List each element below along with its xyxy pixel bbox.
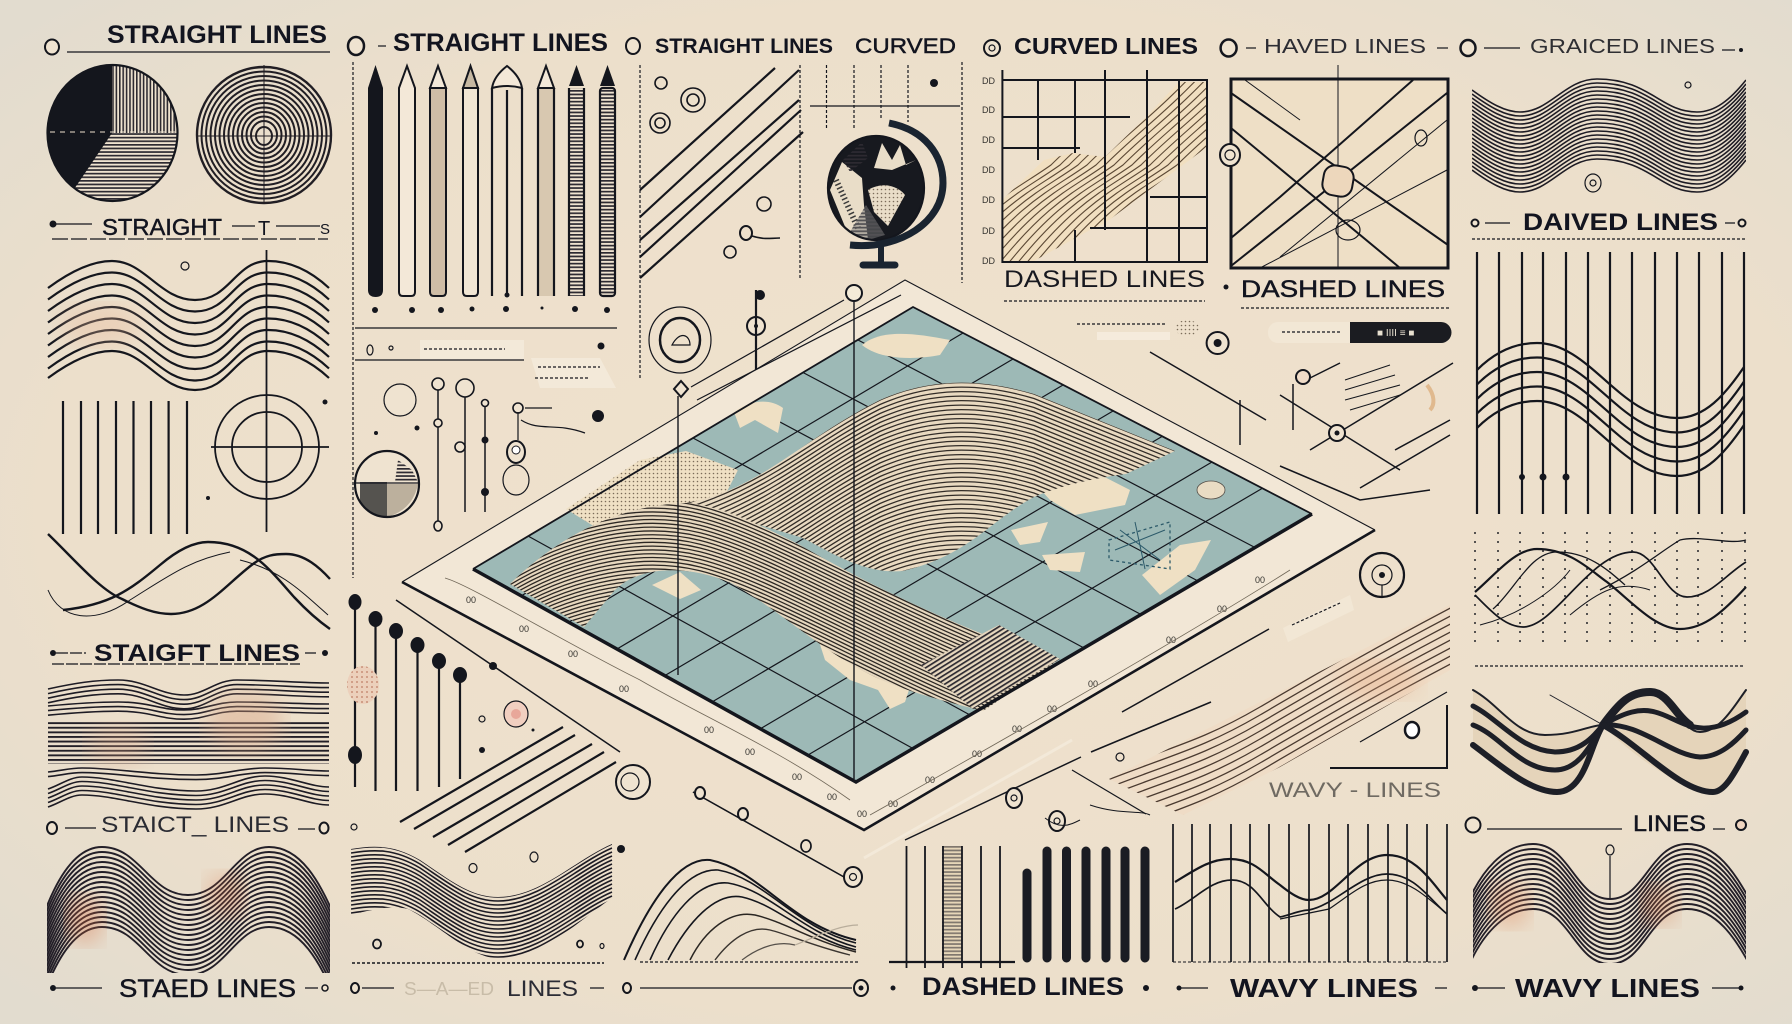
chart: grid with diagonal band — [982, 70, 1208, 264]
heading: lines right — [1466, 811, 1746, 836]
panel: right column — [1460, 36, 1755, 1003]
chart: vertical lines — [63, 401, 187, 534]
axis labels: DD — [982, 256, 995, 266]
land south — [815, 629, 909, 709]
band tick labels: 00 — [925, 775, 935, 785]
chart: fine wave band — [1472, 79, 1746, 192]
pin stems — [355, 602, 460, 791]
heading: lines with ghost text — [351, 976, 631, 1001]
band tick labels: 00 — [1255, 575, 1265, 585]
band tick labels: 00 — [1217, 604, 1227, 614]
heading: dashed lines 2 — [1224, 276, 1450, 308]
grid lines — [1002, 70, 1207, 262]
map grid lines — [521, 333, 1262, 755]
band tick labels: 00 — [857, 809, 867, 819]
pill label — [1268, 322, 1452, 343]
chart: x frame — [1220, 65, 1448, 268]
panel: bottom right of map — [1006, 553, 1460, 855]
vertical pins through map — [674, 285, 901, 779]
pencil 6 — [538, 66, 554, 296]
band tick labels: 00 — [619, 684, 629, 694]
axis labels — [982, 76, 995, 266]
band inner lines — [445, 570, 1290, 815]
icon: concentric ring circle — [197, 65, 331, 203]
tag strip — [1283, 595, 1354, 642]
map top edges — [473, 307, 1312, 569]
heading: lines with ghost text: LINES — [507, 976, 578, 1001]
chart: nine wavy lines — [48, 261, 329, 390]
cross-hatched ribbon end — [921, 625, 1060, 709]
chart: wood grain band — [1109, 608, 1450, 815]
panel: bottom centre charts — [616, 765, 1447, 1003]
heading: straight lines curved — [655, 35, 956, 58]
heading: wavy lines centre: WAVY LINES — [1230, 973, 1418, 1003]
small sphere — [355, 451, 419, 517]
pin balls — [348, 594, 467, 764]
diagonal sketch — [1150, 352, 1453, 500]
axis labels: DD — [982, 76, 995, 86]
heading: straight lines — [45, 21, 330, 54]
chart frame lines — [1330, 692, 1447, 768]
icon: globe — [828, 123, 943, 265]
map outer frame — [402, 280, 1375, 830]
band tick labels: 00 — [972, 749, 982, 759]
chart: diagonal lines bottom — [400, 727, 616, 852]
icon: pin on arch — [1606, 845, 1614, 898]
ghost heading: wavy lines: WAVY - LINES — [1269, 779, 1441, 802]
pencil 3 — [430, 66, 446, 296]
chart: arched wave band — [47, 846, 330, 973]
band tick labels: 00 — [1012, 724, 1022, 734]
pencil 8 — [600, 65, 615, 296]
pin dots — [374, 410, 604, 496]
icon: hatched pie circle — [46, 64, 179, 202]
heading: straight lines curved: CURVED — [855, 35, 956, 58]
heading: dashed lines: DASHED LINES — [1004, 266, 1205, 293]
band tick labels: 00 — [568, 649, 578, 659]
band tick labels: 00 — [704, 725, 714, 735]
scribble markers — [747, 290, 765, 400]
land northwest — [734, 402, 783, 433]
heading: haved lines: HAVED LINES — [1264, 36, 1426, 58]
icon: crosshair circle — [206, 250, 329, 532]
east network detail — [1109, 522, 1170, 569]
land east cluster — [1011, 467, 1211, 595]
diagonal detail lines — [1072, 702, 1211, 814]
heading: graiced lines — [1460, 36, 1743, 58]
heading: staict lines — [47, 812, 328, 837]
heading: straight lines 2: STRAIGHT LINES — [393, 29, 608, 57]
heading: daived lines — [1472, 209, 1746, 239]
panel: central isometric map — [396, 280, 1375, 877]
heading: daived lines: DAIVED LINES — [1523, 209, 1718, 236]
heading: haved lines — [1221, 36, 1448, 58]
heading: wavy lines right — [1472, 973, 1744, 1003]
vertical pins — [438, 390, 485, 529]
small pin markers — [355, 378, 604, 531]
chart: fan curves — [624, 860, 860, 962]
divider: dashed vertical — [352, 62, 354, 578]
heading: dashed lines bold: DASHED LINES — [922, 973, 1124, 1001]
band tick labels: 00 — [792, 772, 802, 782]
heading: staed lines — [50, 975, 328, 1003]
chart: flat wavy band — [48, 680, 329, 809]
target circle — [1360, 553, 1404, 597]
map land masses — [566, 334, 1225, 709]
heading: line and dot — [640, 980, 896, 996]
band tick labels: 00 — [1166, 635, 1176, 645]
pencils chart — [368, 65, 615, 313]
land oval — [1197, 481, 1225, 499]
chart: thick black bars — [1027, 851, 1145, 958]
map teal surface — [473, 307, 1312, 782]
map outer second frame — [396, 600, 1269, 877]
heading: straight lines: STRAIGHT LINES — [107, 21, 327, 49]
heading: staigft lines — [50, 640, 328, 667]
panel: x diagram — [1077, 36, 1453, 500]
band tick labels: 00 — [1047, 704, 1057, 714]
band tick labels: 00 — [466, 595, 476, 605]
heading: staigft lines: STAIGFT LINES — [94, 640, 300, 667]
pencil 2 — [399, 66, 415, 296]
pill label: ■ IIII ≡ ■ — [1377, 328, 1414, 339]
axis labels: DD — [982, 105, 995, 115]
large target with stems — [616, 765, 862, 887]
scattered targets — [1006, 788, 1150, 831]
pins with balls chart — [347, 594, 467, 791]
chart: verticals with waves — [1477, 252, 1744, 514]
chart: dotted crossing waves — [1475, 532, 1746, 666]
chart: crossing curves — [48, 534, 330, 629]
axis labels: DD — [982, 135, 995, 145]
band tick labels: 00 — [519, 624, 529, 634]
axis labels: DD — [982, 195, 995, 205]
pencil dots — [372, 306, 610, 313]
lower map ribbon — [510, 503, 1057, 711]
heading: staict lines: STAICT_ LINES — [101, 812, 289, 837]
heading: staed lines: STAED LINES — [119, 975, 296, 1003]
panel: left column — [40, 21, 338, 1005]
panel: pencils column — [347, 29, 640, 1001]
pencil 1 — [368, 65, 383, 297]
chart: verticals with waves — [1173, 824, 1447, 962]
icons around band — [351, 824, 625, 963]
upper map ribbon — [686, 382, 1175, 572]
target with bar — [1077, 320, 1229, 354]
axis labels: DD — [982, 226, 995, 236]
heading: straight with gaps: STRAIGHT — [102, 214, 222, 240]
pendant icon — [503, 408, 585, 495]
heading: straight with gaps — [50, 214, 330, 240]
pin circles — [384, 378, 523, 531]
panel: top middle — [639, 38, 1208, 378]
label strips — [355, 328, 617, 388]
pencil 7 — [569, 65, 584, 296]
heading: dashed lines 2: DASHED LINES — [1241, 276, 1445, 303]
band tick labels: 00 — [827, 792, 837, 802]
chart: thick twisted waves — [1473, 690, 1746, 792]
heading: straight with gaps: S — [320, 221, 330, 238]
concentric target icon — [649, 307, 711, 373]
pencil 4 — [463, 66, 478, 296]
heading: wavy lines right: WAVY LINES — [1515, 973, 1700, 1003]
chart: diagonal lines with spirals — [640, 65, 803, 380]
pencil 5 — [492, 66, 522, 298]
heading: lines with ghost text: S—A—ED — [404, 979, 494, 999]
heading: lines right: LINES — [1633, 811, 1706, 836]
peach dotted blob — [347, 666, 379, 704]
land north — [862, 334, 950, 358]
chart: dashed verticals with hatched bar — [889, 846, 1015, 968]
band tick labels — [466, 575, 1265, 819]
map bold edges — [473, 514, 1312, 782]
land west dotted — [566, 451, 738, 530]
small marks near map — [479, 662, 534, 753]
heading: wavy lines centre — [1143, 973, 1447, 1003]
heading: graiced lines: GRAICED LINES — [1530, 36, 1715, 58]
heading: curved lines: CURVED LINES — [1014, 33, 1198, 59]
axis labels: DD — [982, 165, 995, 175]
chart: right arched band — [1473, 843, 1746, 963]
dashed grid behind globe — [810, 62, 962, 283]
land southwest — [652, 572, 701, 599]
icon: small circle — [1585, 82, 1691, 192]
heading: straight with gaps: T — [258, 218, 270, 240]
band tick labels: 00 — [888, 799, 898, 809]
chart: purple wave band — [351, 844, 612, 961]
heading: straight lines curved: STRAIGHT LINES — [655, 35, 833, 58]
band hatch — [1003, 82, 1206, 261]
band fill — [1002, 82, 1207, 262]
band tick labels: 00 — [1088, 679, 1098, 689]
band tick labels: 00 — [745, 747, 755, 757]
